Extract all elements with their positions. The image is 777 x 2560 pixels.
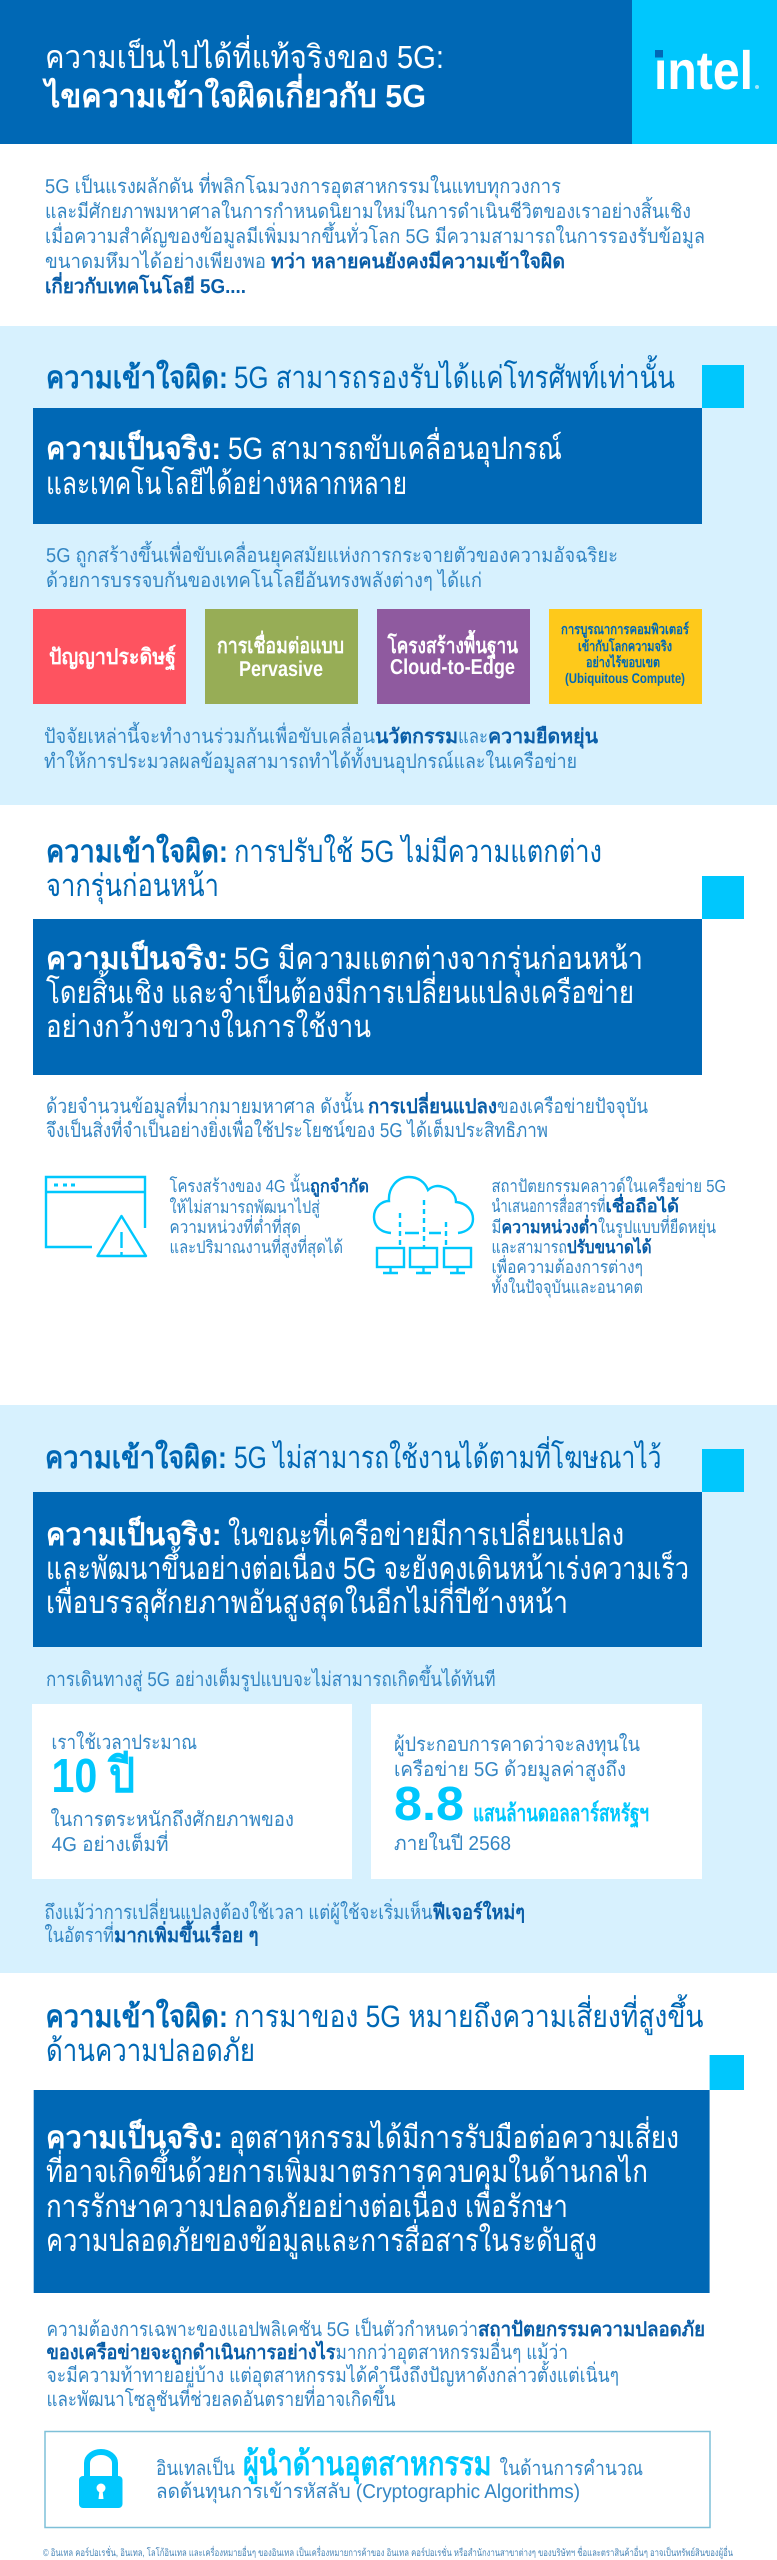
paragraph — [46, 540, 618, 592]
paragraph: มากกว่าอุตสาหกรรมอื่นๆ แม้ว่า — [336, 2338, 568, 2365]
title: ไขความเข้าใจผิดเกี่ยวกับ 5G — [42, 73, 426, 114]
card: Pervasive — [205, 609, 358, 704]
myth heading 2: การปรับใช้ 5G ไม่มีความแตกต่าง — [234, 834, 602, 869]
card: Cloud-to-Edge: โครงสร้างพื้นฐาน — [387, 629, 518, 660]
stat card: 8.8: ผู้ประกอบการคาดว่าจะลงทุนใน — [394, 1733, 640, 1757]
icon: window with warning — [46, 1177, 146, 1257]
paragraph: การเดินทางสู่ 5G อย่างเต็มรูปแบบจะไม่สามารถเกิดขึ้นได้ทันที — [46, 1664, 496, 1692]
accent square — [702, 876, 744, 919]
stat card: 8.8: เครือข่าย 5G ด้วยมูลค่าสูงถึง — [394, 1759, 626, 1782]
myth heading 2: ความเข้าใจผิด: — [46, 833, 228, 869]
text: 4G limits: ให้ไม่สามารถพัฒนาไปสู่ — [170, 1197, 320, 1218]
card: Ubiquitous Compute: การบูรณาการคอมพิวเตอร์ — [561, 621, 689, 638]
text: 4G limits: โครงสร้างของ 4G นั้น — [170, 1173, 310, 1196]
myth heading 3: ความเข้าใจผิด: — [45, 1439, 227, 1475]
reality box 4: ความเป็นจริง: — [46, 2118, 223, 2155]
callout text: อินเทลเป็น — [156, 2456, 235, 2480]
reality box 3: ความเป็นจริง: — [46, 1515, 222, 1552]
panel: myth 2 — [0, 805, 777, 1405]
card: Ubiquitous Compute: อย่างไร้ขอบเขต — [586, 654, 660, 670]
paragraph: จะมีความท้าทายอยู่บ้าง แต่อุตสาหกรรมได้คำนึงถึงปัญหาดังกล่าวตั้งแต่เนิ่นๆ — [46, 2360, 619, 2388]
reality box 4: ความปลอดภัยของข้อมูลและการสื่อสารในระดับสูง — [46, 2219, 597, 2260]
paragraph: ความต้องการเฉพาะของแอปพลิเคชัน 5G เป็นตัวกำหนดว่า — [46, 2317, 478, 2341]
intro text — [45, 172, 705, 298]
paragraph: 5G ถูกสร้างขึ้นเพื่อขับเคลื่อนยุคสมัยแห่งการกระจายตัวของความอัจฉริยะ — [46, 540, 618, 568]
card: Ubiquitous Compute — [549, 609, 702, 704]
callout: industry leader — [45, 2432, 710, 2528]
stat card: 10 years: ในการตระหนักถึงศักยภาพของ — [50, 1808, 294, 1831]
closing paragraph: ปัจจัยเหล่านี้จะทำงานร่วมกันเพื่อขับเคลื่อน — [44, 721, 375, 748]
card: Cloud-to-Edge: Cloud-to-Edge — [390, 655, 515, 679]
myth heading 4 — [46, 1994, 704, 2068]
callout text — [156, 2445, 643, 2504]
intro text: เมื่อความสำคัญของข้อมูลมีเพิ่มมากขึ้นทั่วโลก 5G มีความสามารถในการรองรับข้อมูล — [45, 221, 705, 249]
reality box 2 — [33, 919, 702, 1075]
myth heading 2 — [46, 833, 602, 905]
intro text: 5G เป็นแรงผลักดัน ที่พลิกโฉมวงการอุตสาหกรรมในแทบทุกวงการ — [45, 172, 561, 199]
text: 5G cloud architecture: ในรูปแบบที่ยืดหยุ่น — [598, 1215, 716, 1238]
text: 5G cloud architecture — [492, 1176, 726, 1298]
reality box 2: 5G มีความแตกต่างจากรุ่นก่อนหน้า — [234, 941, 643, 978]
reality box 4: ที่อาจเกิดขึ้นด้วยการเพิ่มมาตรการควบคุมในด้านกลไก — [46, 2149, 648, 2191]
intel logo: intel — [654, 41, 753, 101]
closing paragraph: ทำให้การประมวลผลข้อมูลสามารถทำได้ทั้งบนอุปกรณ์และในเครือข่าย — [44, 746, 577, 774]
myth heading 3 — [45, 1436, 662, 1475]
paragraph: ด้วยการบรรจบกันของเทคโนโลยีอันทรงพลังต่างๆ ได้แก่ — [46, 568, 482, 592]
myth heading 2: จากรุ่นก่อนหน้า — [46, 868, 219, 905]
reality box 1 — [33, 408, 702, 524]
text: 5G cloud architecture: มี — [492, 1217, 502, 1237]
intro text: และมีศักยภาพมหาศาลในการกำหนดนิยามใหม่ในการดำเนินชีวิตของเราอย่างสิ้นเชิง — [45, 196, 691, 223]
reality box 4: การรักษาความปลอดภัยอย่างต่อเนื่อง เพื่อรักษา — [46, 2185, 568, 2224]
stat card: 10 years: เราใช้เวลาประมาณ — [52, 1731, 197, 1754]
card: Cloud-to-Edge — [377, 609, 530, 704]
reality box 1: 5G สามารถขับเคลื่อนอุปกรณ์ — [228, 427, 562, 468]
stat card: 10 years: 10 ปี — [52, 1750, 135, 1803]
paragraph: ของเครือข่ายปัจจุบัน — [497, 1096, 648, 1119]
card: Ubiquitous Compute: (Ubiquitous Compute) — [565, 670, 685, 686]
panel: myth 4 — [0, 1973, 777, 2560]
stat card: 8.8: ภายในปี 2568 — [394, 1832, 511, 1855]
text: 4G limits: และปริมาณงานที่สูงที่สุดได้ — [170, 1235, 343, 1258]
paragraph: จึงเป็นสิ่งที่จำเป็นอย่างยิ่งเพื่อใช้ประโยชน์ของ 5G ได้เต็มประสิทธิภาพ — [46, 1116, 548, 1142]
title — [42, 35, 444, 114]
paragraph: ของเครือข่ายจะถูกดำเนินการอย่างไร — [46, 2340, 336, 2365]
card: Pervasive: การเชื่อมต่อแบบ — [217, 630, 344, 658]
panel: myth 3 — [0, 1405, 777, 1973]
myth heading 3: 5G ไม่สามารถใช้งานได้ตามที่โฆษณาไว้ — [234, 1436, 662, 1475]
icon: cloud network — [374, 1177, 473, 1273]
paragraph — [46, 1091, 648, 1142]
intel logo — [632, 0, 777, 144]
title: ความเป็นไปได้ที่แท้จริงของ 5G: — [45, 35, 444, 75]
myth heading 1: 5G สามารถรองรับได้แค่โทรศัพท์เท่านั้น — [234, 355, 675, 395]
text: 5G cloud architecture: ปรับขนาดได้ — [567, 1236, 652, 1257]
paragraph: สถาปัตยกรรมความปลอดภัย — [478, 2319, 705, 2341]
text: 5G cloud architecture: ทั้งในปัจจุบันและอนาคต — [492, 1274, 643, 1298]
closing paragraph: มากเพิ่มขึ้นเรื่อย ๆ — [114, 1920, 258, 1947]
intro text: ทว่า หลายคนยังคงมีความเข้าใจผิด — [271, 249, 565, 273]
text: 4G limits: ความหน่วงที่ต่ำที่สุด — [170, 1215, 301, 1238]
stat card: 10 years: 4G อย่างเต็มที่ — [52, 1830, 168, 1856]
panel: myth 1 — [0, 326, 777, 805]
paragraph — [46, 2317, 705, 2412]
callout text: ผู้นำด้านอุตสาหกรรม — [243, 2445, 492, 2485]
myth heading 4: ด้านความปลอดภัย — [46, 2033, 255, 2068]
stat card: 10 years — [32, 1704, 352, 1879]
text: 4G limits — [170, 1173, 369, 1258]
reality box 1: ความเป็นจริง: — [46, 429, 221, 466]
reality box 1: และเทคโนโลยีได้อย่างหลากหลาย — [46, 466, 407, 501]
reality box 2: โดยสิ้นเชิง และจำเป็นต้องมีการเปลี่ยนแปลงเครือข่าย — [46, 970, 634, 1010]
closing paragraph — [44, 721, 598, 774]
closing paragraph: นวัตกรรม — [375, 726, 458, 748]
closing paragraph: ฟีเจอร์ใหม่ๆ — [432, 1900, 525, 1924]
text: 5G cloud architecture: นำเสนอการสื่อสารที่ — [492, 1194, 606, 1216]
header banner — [0, 0, 777, 144]
closing paragraph: และ — [458, 726, 488, 748]
accent square — [702, 365, 744, 408]
reality box 4 — [34, 2090, 710, 2293]
myth heading 1 — [46, 355, 675, 395]
card: AI — [33, 609, 186, 704]
myth heading 4: ความเข้าใจผิด: — [46, 1998, 228, 2034]
callout text: ลดต้นทุนการเข้ารหัสลับ (Cryptographic Algorithms) — [156, 2481, 580, 2504]
stat card: 8.8: แสนล้านดอลลาร์สหรัฐฯ — [473, 1800, 649, 1829]
accent square — [710, 2055, 744, 2090]
card: AI: ปัญญาประดิษฐ์ — [49, 644, 176, 671]
card: Pervasive: Pervasive — [239, 657, 323, 681]
reality box 3: ในขณะที่เครือข่ายมีการเปลี่ยนแปลง — [228, 1513, 624, 1552]
accent square — [702, 1449, 744, 1492]
reality box 4: อุตสาหกรรมได้มีการรับมือต่อความเสี่ยง — [229, 2116, 679, 2157]
closing paragraph: ถึงแม้ว่าการเปลี่ยนแปลงต้องใช้เวลา แต่ผู้ใช้จะเริ่มเห็น — [44, 1898, 433, 1925]
stat card: 8.8 — [371, 1704, 702, 1879]
stat card: 8.8: 8.8 — [394, 1778, 464, 1831]
reality box 3 — [33, 1492, 702, 1647]
myth heading 1: ความเข้าใจผิด: — [46, 359, 228, 395]
myth heading 4: การมาของ 5G หมายถึงความเสี่ยงที่สูงขึ้น — [234, 1994, 704, 2036]
paragraph: ด้วยจำนวนข้อมูลที่มากมายมหาศาล ดังนั้น — [46, 1091, 364, 1119]
text: 5G cloud architecture: ความหน่วงต่ำ — [502, 1214, 598, 1237]
text: 5G cloud architecture: และสามารถ — [492, 1237, 567, 1257]
reality box 2: ความเป็นจริง: — [46, 939, 228, 976]
intro text: ขนาดมหึมาได้อย่างเพียงพอ — [45, 250, 266, 273]
intro text: เกี่ยวกับเทคโนโลยี 5G.... — [45, 272, 246, 298]
closing paragraph — [44, 1898, 525, 1947]
text: 5G cloud architecture: สถาปัตยกรรมคลาวด์ในเครือข่าย 5G — [492, 1176, 726, 1196]
reality box 2: อย่างกว้างขวางในการใช้งาน — [46, 1009, 371, 1044]
paragraph: และพัฒนาโซลูชันที่ช่วยลดอันตรายที่อาจเกิดขึ้น — [46, 2384, 396, 2412]
icon: padlock — [79, 2452, 122, 2508]
closing paragraph: ความยืดหยุ่น — [488, 725, 598, 749]
card: Ubiquitous Compute: เข้ากับโลกความจริง — [578, 637, 672, 654]
reality box 3: เพื่อบรรลุศักยภาพอันสูงสุดในอีกไม่กี่ปีข้างหน้า — [46, 1581, 568, 1622]
text: 5G cloud architecture: เพื่อความต้องการต่างๆ — [492, 1255, 643, 1277]
paragraph: การเปลี่ยนแปลง — [368, 1092, 497, 1118]
text: 5G cloud architecture: เชื่อถือได้ — [606, 1193, 679, 1216]
callout text: ในด้านการคำนวณ — [500, 2457, 643, 2480]
closing paragraph: ในอัตราที่ — [44, 1921, 114, 1947]
text: 4G limits: ถูกจำกัด — [310, 1176, 369, 1197]
